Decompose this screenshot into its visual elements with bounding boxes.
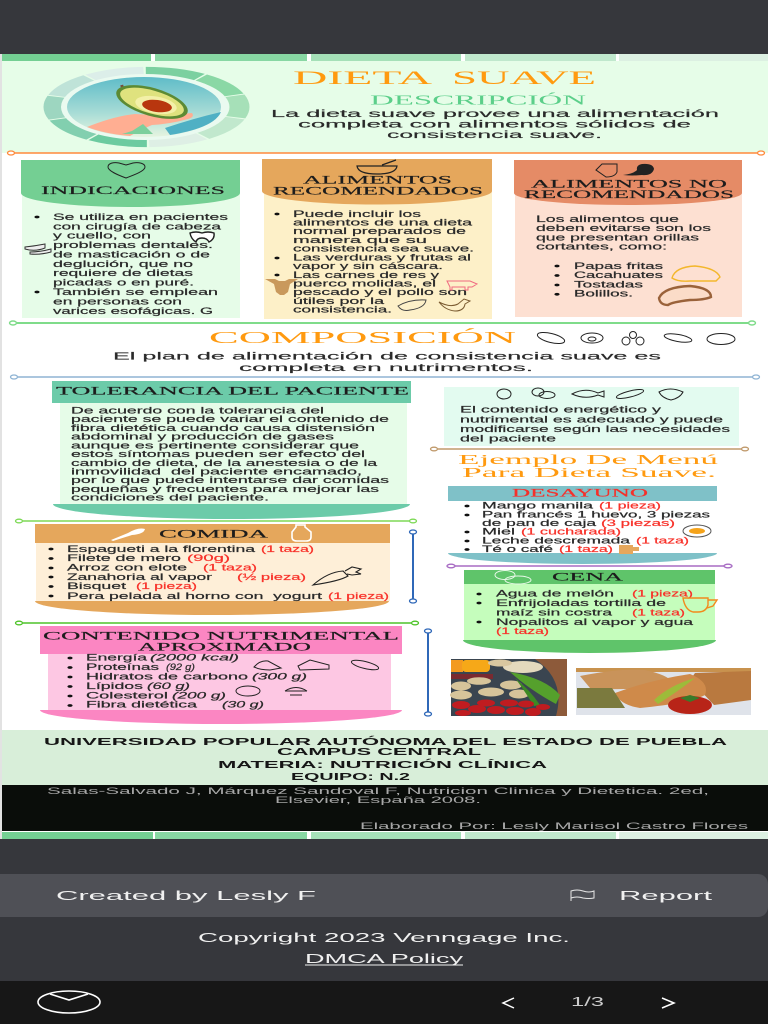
text: recomendados list: pescado y el pollo son [293, 287, 467, 297]
text: recomendados list: manera que su [293, 235, 427, 245]
heading: alimentos recomendados [273, 172, 483, 198]
text: desayuno menu: Pan francés 1 huevo, 3 piezas [482, 509, 711, 519]
text: desayuno menu: Té o café [482, 544, 553, 554]
icon: venngage logo [38, 991, 100, 1013]
text: recomendados list: normal preparados de [293, 226, 466, 236]
text: cena menu: Agua de melón [496, 589, 614, 599]
divider: green [10, 321, 756, 325]
heading: tolerancia: TOLERANCIA DEL PACIENTE [56, 384, 409, 398]
divider: tan [430, 447, 748, 451]
text: recomendados list: Puede incluir los [293, 209, 422, 219]
text: no recomendados intro: que presentan orillas [536, 233, 700, 243]
text: nutrient list: Colesterol [86, 690, 168, 700]
panel: university credits: MATERIA: NUTRICIÓN CLÍNICA [218, 759, 547, 771]
icon: avocado medallion [54, 71, 240, 143]
text: indicaciones list: También se emplean [53, 287, 218, 297]
divider: orange [8, 151, 764, 155]
link: dmca policy: DMCA Policy [305, 952, 465, 966]
description text [271, 109, 720, 141]
heading: contenido nutrimental: CONTENIDO NUTRIMENTAL [43, 628, 399, 642]
text: no recomendados intro: cortantes, como: [536, 242, 667, 252]
text: recomendados list: consistencia sea suave. [293, 244, 474, 254]
panel: university credits [2, 730, 768, 785]
text: cena menu: (1 taza) [632, 607, 685, 617]
text: cena menu: Nopalitos al vapor y agua [496, 617, 695, 627]
text: no recomendados list: Tostadas [574, 279, 644, 289]
icon: bottle [292, 525, 311, 541]
text: nutrient list: (60 g) [147, 681, 190, 691]
heading: alimentos no recomendados: ALIMENTOS NO [531, 176, 728, 190]
text: tolerancia: abdominal y producción de gases [71, 432, 335, 442]
text: no recomendados intro: Los alimentos que [536, 214, 679, 224]
icon: mortar [357, 160, 397, 174]
icon: flag [571, 890, 594, 901]
text: indicaciones list: varices esofágicas. G [53, 306, 213, 316]
icon: carrot [313, 567, 361, 585]
panel: university credits: EQUIPO: N.2 [291, 772, 411, 783]
text: comida menu: (1 pieza) [136, 581, 197, 591]
panel: alimentos recomendados [262, 159, 492, 319]
infographic page background [0, 54, 768, 839]
text: recomendados list: Las carnes de res y [293, 270, 440, 280]
text: desayuno menu [464, 500, 711, 554]
divider: purple [447, 564, 732, 568]
text: no recomendados list [554, 261, 664, 299]
title [293, 68, 596, 89]
text: desayuno menu: (1 taza) [636, 535, 689, 545]
text: desayuno menu: (1 taza) [559, 544, 613, 554]
icon: cow [265, 279, 298, 295]
text: no recomendados intro: deben evitarse son los [536, 223, 712, 233]
bottom colour bar [2, 832, 768, 839]
panel: references: Elsevier, España 2008. [275, 794, 481, 805]
text: comida menu: Pera pelada al horno con yogurt [67, 591, 323, 601]
text: nutrient list: Hidratos de carbono [86, 672, 248, 682]
text: comida menu: (1 pieza) [328, 591, 389, 601]
photo: vegetables [450, 659, 567, 716]
heading: contenido nutrimental: APROXIMADO [138, 640, 312, 654]
text: composición: El plan de alimentación de consistencia suave es [113, 352, 661, 362]
description text: La dieta suave provee una alimentación [271, 109, 720, 120]
icon: spoon [111, 528, 145, 541]
description text: completa con alimentos sólidos de [298, 120, 692, 130]
arrow: blue vertical connector 2 [424, 629, 432, 716]
page number: 1/3 [571, 995, 604, 1009]
panel: references: Salas-Salvado J, Márquez Sandoval F, Nutricion Clinica y Dietetica. 2ed, [47, 785, 709, 796]
text: comida menu: Arroz con elote [67, 562, 187, 572]
text: indicaciones list [34, 212, 229, 316]
text: nutrient list: Lípidos [86, 681, 144, 691]
creator bar: Created by Lesly F [56, 889, 317, 903]
icon: pig [447, 281, 477, 290]
icon: heart [108, 163, 145, 178]
text: tolerancia: pequeñas y frecuentes para mejorar las [71, 484, 380, 494]
text: indicaciones list: de masticación o de [53, 250, 210, 260]
text: desayuno menu: (1 pieza) [599, 500, 661, 510]
text: comida menu: (1 taza) [203, 562, 257, 572]
text: comida menu: Espagueti a la florentina [67, 544, 257, 554]
text: nutrient list [67, 653, 307, 710]
text: indicaciones list: Se utiliza en pacientes [53, 212, 229, 222]
text: desayuno menu: (1 cucharada) [521, 526, 621, 536]
panel: contenido nutrimental [40, 626, 402, 724]
text: nutrient list: Energía [86, 653, 149, 663]
icon: fish [398, 300, 426, 310]
text: nutrient list: Proteínas [86, 662, 160, 672]
text: nutrient list: (200 g) [172, 690, 226, 700]
arrow: blue vertical connector 1 [410, 530, 416, 603]
icon: previous [503, 998, 514, 1008]
icon: circles [495, 570, 531, 584]
text: recomendados list: alimentos de una dieta [293, 218, 474, 228]
panel: cena [463, 570, 717, 653]
heading: cena: CENA [552, 570, 624, 584]
heading: alimentos no recomendados [524, 176, 734, 201]
text: tolerancia: De acuerdo con la tolerancia del [71, 406, 324, 416]
top colour bar [2, 54, 768, 61]
photo: grilled chicken [576, 668, 751, 715]
panel: alimentos no recomendados [514, 160, 742, 317]
text: tolerancia: paciente se puede variar el contenido de [71, 414, 389, 424]
text: recomendados list: consistencia. [293, 305, 392, 315]
text: nutrient list: Fibra dietética [86, 700, 199, 710]
text: desayuno menu: (3 piezas) [601, 518, 675, 528]
text: tolerancia: estos síntomas pueden ser efecto del [71, 449, 365, 459]
text: indicaciones list: con cirugía de cabeza [53, 222, 223, 232]
panel: desayuno [448, 486, 717, 564]
text: composición: completa en nutrimentos. [239, 363, 533, 374]
title: DIETA [293, 68, 433, 89]
panel: comida [35, 524, 390, 615]
text: indicaciones list: problemas dentales. [53, 240, 213, 250]
panel: contenido energético [444, 387, 739, 446]
heading: alimentos no recomendados: RECOMENDADOS [524, 187, 734, 201]
text: comida menu: (1 taza) [261, 544, 314, 554]
text: composición [113, 352, 661, 374]
icons: food row 2 [497, 388, 683, 400]
text: comida menu: Filete de mero [67, 553, 181, 563]
text: cena menu: (1 taza) [496, 626, 549, 636]
subtitle: descripción: DESCRIPCIÓN [370, 92, 586, 108]
text: contenido energético: modificarse según las necesidades [460, 424, 731, 434]
icon: hen [439, 299, 470, 311]
heading: alimentos recomendados: RECOMENDADOS [273, 184, 483, 198]
panel: university credits: CAMPUS CENTRAL [277, 747, 481, 758]
text: recomendados list: puerco molidas, el [293, 278, 436, 288]
heading: comida: COMIDA [159, 526, 269, 540]
text: comida menu: Bisquet [67, 581, 127, 591]
creator bar: Report [619, 889, 713, 903]
description text: consistencia suave. [387, 130, 602, 141]
panel: indicaciones [21, 160, 240, 318]
text: contenido energético: nutrimental es adecuado y puede [460, 414, 723, 424]
heading: contenido nutrimental [43, 628, 399, 654]
icon: cup [619, 545, 639, 554]
icon: orange cup [683, 598, 717, 612]
panel: header [2, 61, 768, 153]
text: tolerancia: aunque es pertinente considerar que [71, 440, 359, 450]
heading: alimentos recomendados: ALIMENTOS [303, 172, 452, 186]
text: no recomendados intro [536, 214, 712, 252]
text: desayuno menu: Mango manila [482, 500, 595, 510]
copyright: Copyright 2023 Venngage Inc. [198, 931, 570, 945]
text: cena menu: maíz sin costra [496, 607, 614, 617]
icon: taco yellow [672, 266, 720, 281]
text: indicaciones list: deglución, que no [53, 259, 193, 269]
text: nutrient list: (2000 kcal) [150, 653, 239, 663]
text: tolerancia: condiciones del paciente. [71, 492, 269, 502]
text: nutrient list: (30 g) [222, 700, 264, 710]
text: desayuno menu: de pan de caja [482, 518, 598, 528]
text: recomendados list [274, 209, 474, 315]
text: no recomendados list: Bolillos. [574, 289, 633, 299]
text: contenido energético: El contenido energético y [460, 405, 662, 415]
text: cena menu [476, 589, 695, 636]
icon: hand and stomach [596, 164, 654, 177]
text: comida menu: Zanahoria al vapor [67, 572, 212, 582]
text: comida menu [48, 544, 389, 601]
heading: composición: COMPOSICIÓN [209, 328, 516, 347]
text: desayuno menu: Leche descremada [482, 535, 632, 545]
heading: indicaciones: INDICACIONES [41, 183, 225, 197]
text: indicaciones list: requiere de dietas [53, 268, 194, 278]
title: SUAVE [452, 68, 596, 89]
text: desayuno menu: Miel [482, 526, 515, 536]
text: recomendados list: vapor y sin cáscara. [293, 261, 443, 271]
text: indicaciones list: en personas con [53, 297, 182, 307]
heading: ejemplo de menú [458, 453, 718, 481]
text: nutrient list: (92 g) [166, 662, 195, 672]
icon: next [662, 998, 674, 1008]
icons: nutrient foods [236, 658, 379, 696]
text: tolerancia: cambio de dieta, de la anestesia o de la [71, 458, 379, 468]
text: tolerancia [71, 406, 390, 502]
icon: taco brown [659, 286, 711, 305]
text: comida menu: (½ pieza) [237, 572, 306, 582]
panel: references: Elaborado Por: Lesly Marisol Castro Flores [360, 820, 749, 831]
text: contenido energético [460, 405, 731, 443]
text: recomendados list: útiles por la [293, 296, 386, 306]
icons: food row [536, 330, 735, 346]
icon: dentures [25, 244, 51, 254]
panel: university credits: UNIVERSIDAD POPULAR AUTÓNOMA DEL ESTADO DE PUEBLA [44, 736, 727, 748]
text: cena menu: Enfrijoladas tortilla de [496, 598, 666, 608]
heading: desayuno: DESAYUNO [512, 486, 649, 500]
panel: tolerancia del paciente [52, 381, 411, 519]
icon: fried egg [683, 525, 711, 537]
panel: references [2, 785, 768, 831]
bottom navigation bar [0, 981, 768, 1024]
divider: lime [16, 519, 416, 523]
text: comida menu: (90g) [187, 553, 230, 563]
divider: blue [10, 375, 760, 379]
heading: ejemplo de menú: Ejemplo De Menú [458, 453, 718, 468]
text: nutrient list: (300 g) [252, 672, 307, 682]
text: no recomendados list: Papas fritas [574, 261, 664, 271]
text: tolerancia: inmovilidad del paciente encamado, [71, 466, 362, 476]
text: indicaciones list: y cuello, con [53, 231, 151, 241]
icon: tooth [190, 232, 214, 242]
text: recomendados list: Las verduras y frutas al [293, 252, 471, 262]
text: tolerancia: fibra dietética cuando causa distensión [71, 423, 375, 433]
divider: green 2 [16, 621, 418, 625]
text: cena menu: (1 pieza) [632, 589, 693, 599]
text: indicaciones list: picadas o en puré. [53, 278, 194, 288]
text: no recomendados list: Cacahuates [574, 270, 664, 280]
text: contenido energético: del paciente [460, 433, 556, 443]
text: tolerancia: por lo que puede intentarse dar comidas [71, 475, 390, 485]
heading: ejemplo de menú: Para Dieta Suave. [462, 466, 716, 481]
creator bar [0, 874, 768, 917]
